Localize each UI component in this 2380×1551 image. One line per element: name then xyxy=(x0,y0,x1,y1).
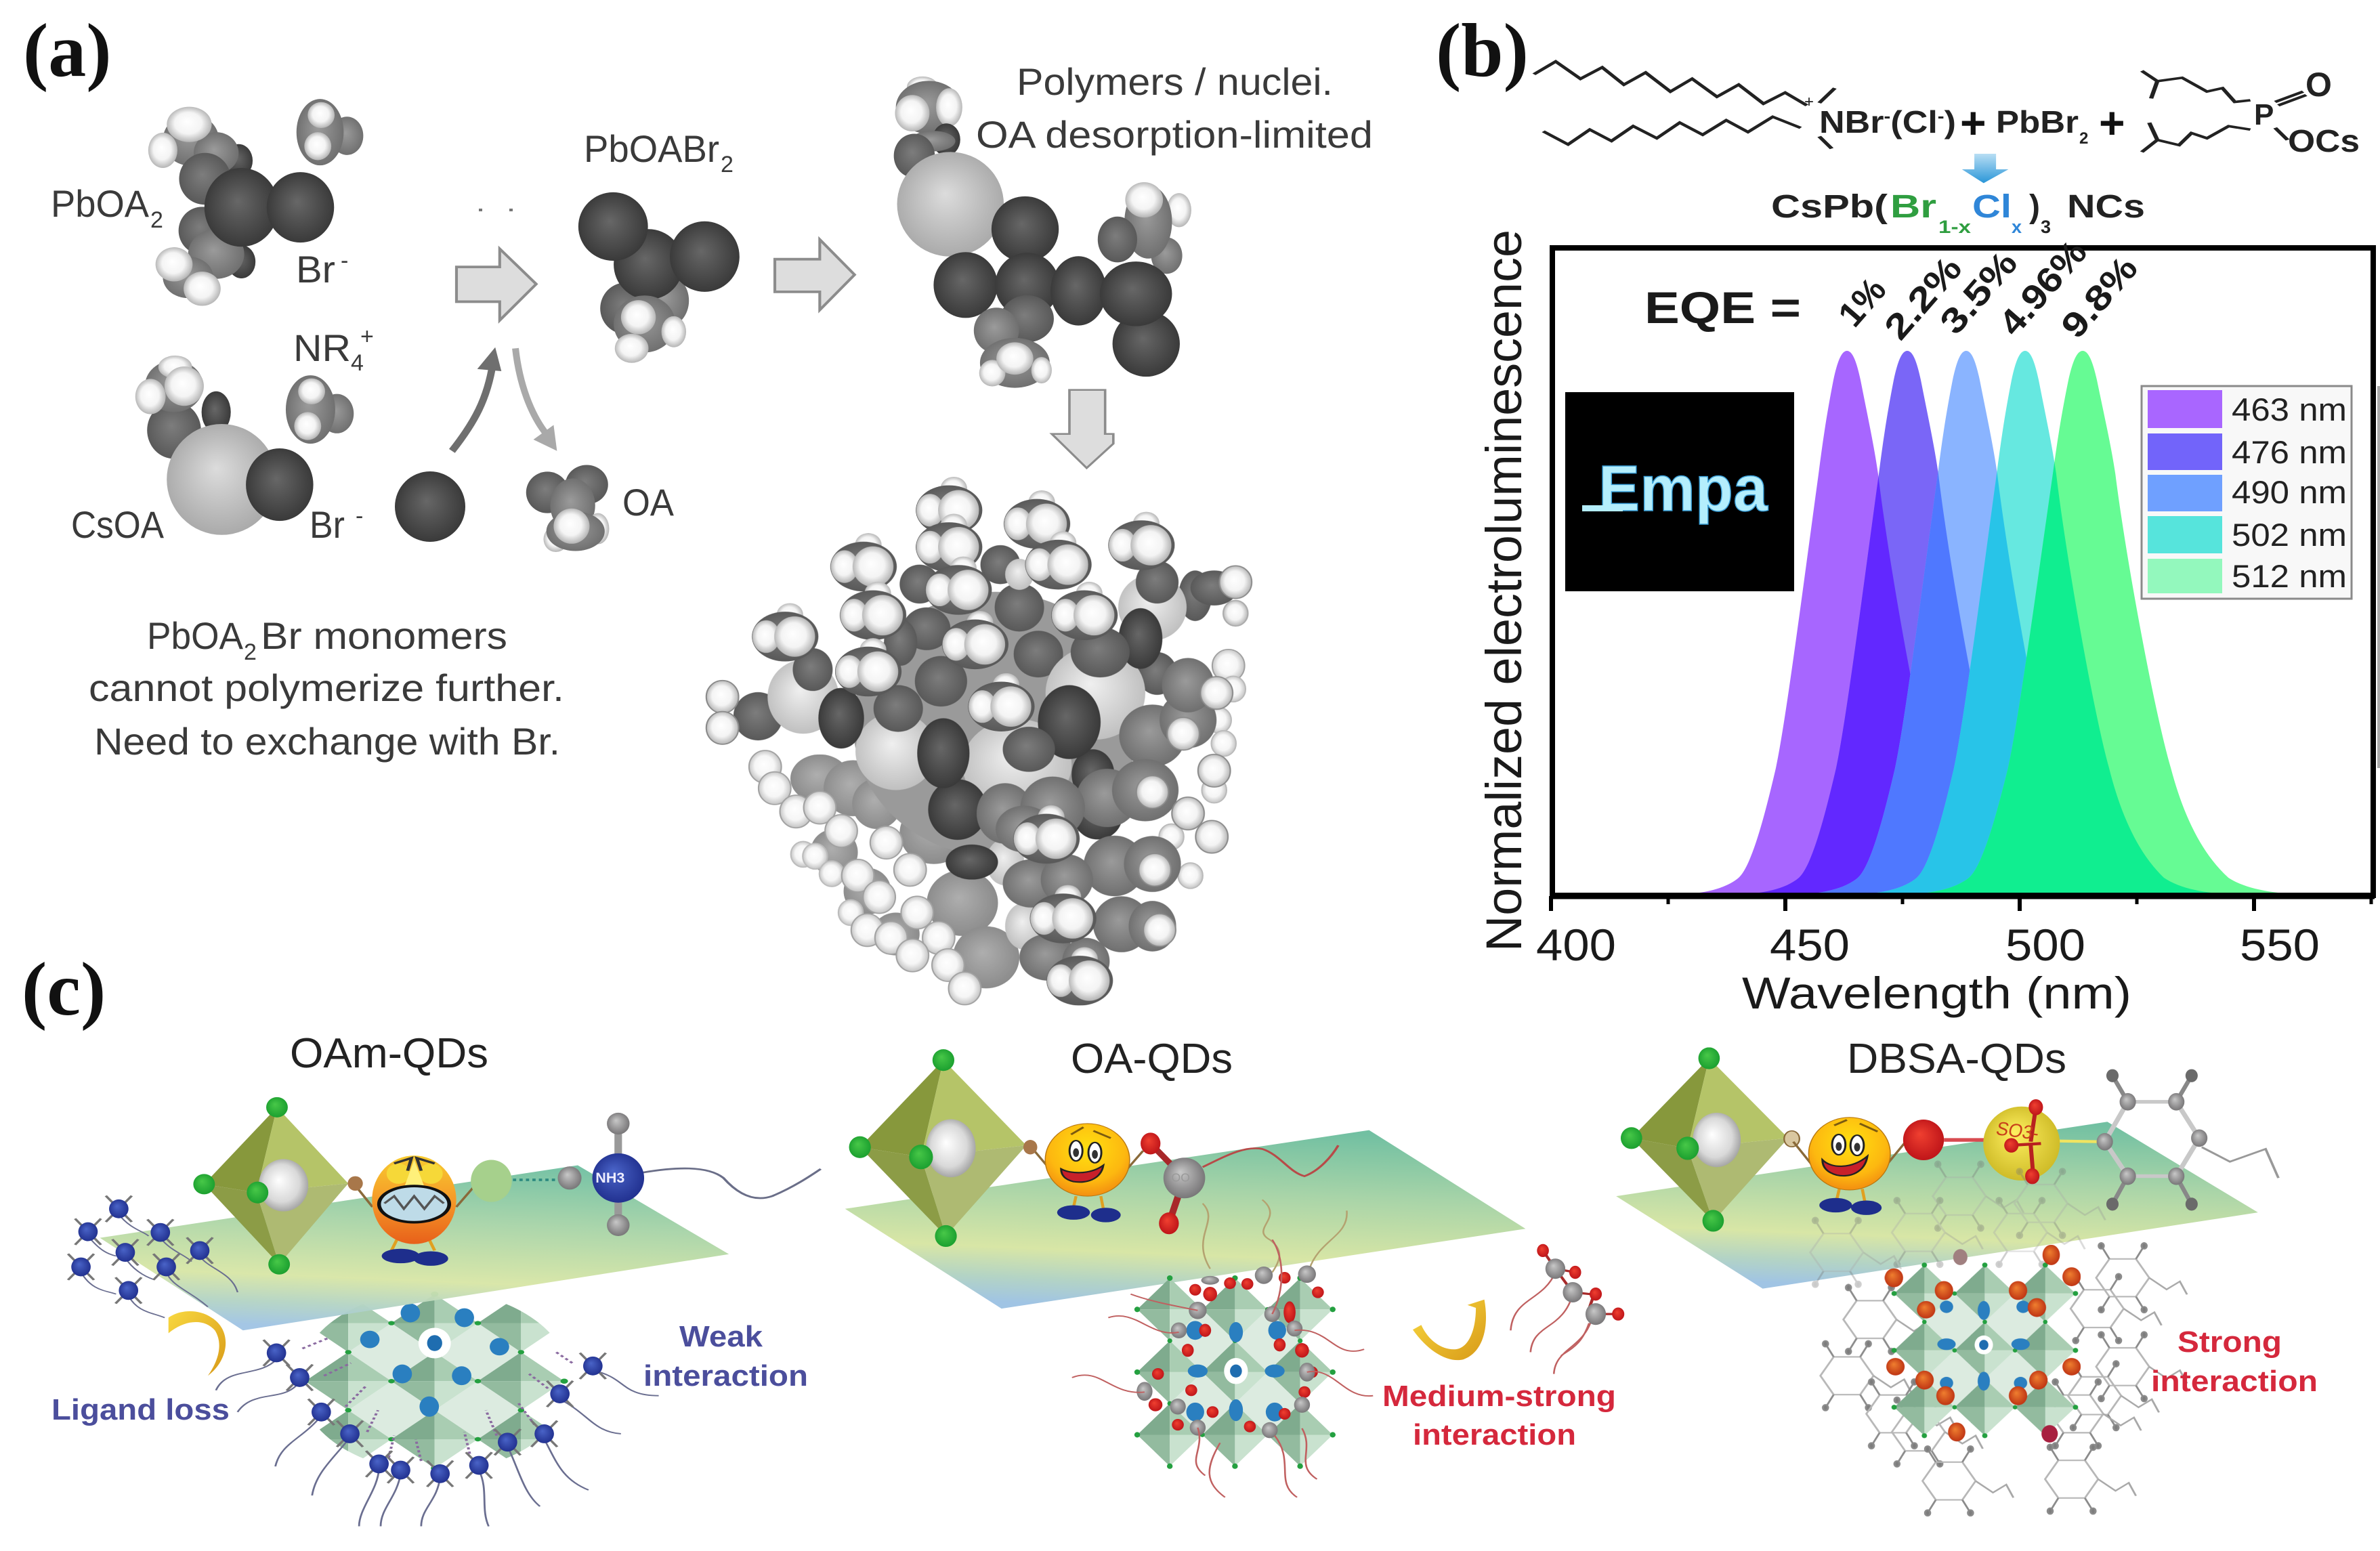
illustration OAm xyxy=(68,1097,821,1527)
text: NR4+: NR xyxy=(293,326,351,369)
atoms NH3 xyxy=(471,1113,821,1236)
text: Weak interaction: interaction xyxy=(643,1359,808,1393)
photo: Empa logo xyxy=(1565,392,1794,591)
tick labels: 450 xyxy=(1770,920,1850,970)
text: product formula: NCs xyxy=(2067,189,2145,225)
text: Weak interaction xyxy=(643,1320,808,1393)
text: EQE values: 2.2% xyxy=(1877,249,1970,347)
legend: 463 nm xyxy=(2232,391,2347,427)
panel (b): emission spectra xyxy=(1436,9,2380,1018)
text: NBr(Cl) xyxy=(1804,93,1956,140)
y axis label: Normalized electroluminescence xyxy=(1476,230,1532,952)
text: Strong interaction xyxy=(2151,1325,2318,1398)
text: product formula: CsPb( xyxy=(1771,189,1888,225)
arrow: right 2 xyxy=(775,240,855,310)
ligands around dot xyxy=(1821,1243,2187,1516)
series 463 nm xyxy=(1674,351,2064,895)
text: NR4+: + xyxy=(360,324,374,349)
bound ligands xyxy=(216,1338,659,1527)
chemical structure: phosphinate xyxy=(2142,66,2360,158)
overlap 490/502 xyxy=(1877,471,2026,893)
quantum dot xyxy=(1134,1265,1336,1469)
text: NR4+: 4 xyxy=(351,350,364,376)
subpanel: OA-QDs xyxy=(845,1036,1624,1497)
text: Strong interaction: interaction xyxy=(2151,1365,2318,1398)
arrow yellow xyxy=(1413,1300,1486,1360)
edge strip xyxy=(2377,386,2380,768)
atoms NH3: NH3 xyxy=(595,1170,625,1186)
text: product formula: ) xyxy=(2029,189,2040,225)
text: monomers note: Need to exchange with Br. xyxy=(94,720,560,763)
text: Medium-strong interaction xyxy=(1382,1380,1616,1451)
core backing xyxy=(853,592,1138,856)
chemical structure: phosphinate: OCs xyxy=(2288,123,2360,158)
text: NBr(Cl): ) xyxy=(1945,104,1956,140)
panel (a): reaction scheme xyxy=(23,9,1373,1006)
text: NBr(Cl): + xyxy=(1804,93,1814,111)
tick labels: 500 xyxy=(2005,920,2085,970)
text: EQE values: 1% xyxy=(1831,270,1894,335)
text: plus: + xyxy=(2099,98,2125,148)
text: NBr(Cl): - xyxy=(1884,106,1890,126)
panel (c): ligand binding xyxy=(22,948,2318,1527)
scared face xyxy=(347,1155,475,1266)
chart frame and ticks xyxy=(1550,248,2375,911)
text: product formula: x xyxy=(2012,217,2022,237)
molecule: polymer chain xyxy=(894,77,1191,388)
light Cs spheres xyxy=(767,559,1187,950)
text: PbBr2: 2 xyxy=(2079,129,2088,148)
chemical structure: phosphinate: O xyxy=(2305,66,2332,104)
label (a): (a) xyxy=(23,9,112,93)
overlap 502/512 xyxy=(1928,462,2211,893)
chemical structure: phosphinate: P xyxy=(2254,98,2274,131)
text: Br- upper: - xyxy=(341,248,348,274)
text: product formula: 3 xyxy=(2041,217,2051,237)
octahedron xyxy=(1621,1047,1800,1232)
text: EQE values: 4.96% xyxy=(1991,233,2095,343)
legend: 502 nm xyxy=(2232,517,2347,553)
molecule: CsOA xyxy=(135,356,314,535)
text: monomers note: cannot polymerize further. xyxy=(89,666,564,709)
text: EQE values: 3.5% xyxy=(1932,244,2025,342)
happy face xyxy=(1023,1124,1143,1223)
text: product formula xyxy=(1771,189,2145,237)
label (c): (c) xyxy=(22,948,106,1032)
text: NBr(Cl): NBr xyxy=(1819,104,1876,140)
subpanel: OAm-QDs xyxy=(51,1030,821,1527)
mid gray backbones xyxy=(734,545,1238,740)
molecule: PbOABr2 xyxy=(578,192,740,363)
text: CsOA: CsOA xyxy=(71,503,165,546)
plane xyxy=(1616,1122,2258,1289)
text: plus: + xyxy=(1960,98,1986,148)
text: PbOA2: PbOA xyxy=(51,182,150,225)
legend xyxy=(2142,386,2352,599)
sphere: Br ion xyxy=(395,471,465,542)
text: product formula: Cl xyxy=(1972,189,2012,225)
text: Medium-strong interaction: interaction xyxy=(1413,1418,1576,1451)
chemical structure: ammonium salt xyxy=(1534,62,1835,148)
lower right gray blocks xyxy=(977,658,1216,985)
text: OA: OA xyxy=(622,481,675,524)
methyl caps xyxy=(916,477,982,535)
arrow ligand loss xyxy=(169,1311,226,1376)
text: NR4+ xyxy=(293,324,374,376)
text: PbOABr2: 2 xyxy=(721,152,734,177)
legend: 512 nm xyxy=(2232,558,2347,594)
molecule: PbOA2 xyxy=(148,107,334,306)
title: OAm-QDs xyxy=(290,1030,488,1077)
text: NBr(Cl): - xyxy=(1938,106,1945,126)
quantum dot xyxy=(301,1292,568,1471)
text: NBr(Cl): (Cl xyxy=(1890,104,1938,140)
series 490 nm xyxy=(1793,351,2183,895)
text: Medium-strong interaction: Medium-strong xyxy=(1382,1380,1616,1413)
arrow: exchange up and OA release xyxy=(452,347,557,451)
atoms carboxyl: OO xyxy=(1172,1170,1190,1185)
illustration OA xyxy=(845,1049,1592,1497)
tick labels xyxy=(1536,920,2320,970)
text: polymers note xyxy=(976,60,1373,156)
molecule: nanocrystal cluster xyxy=(706,477,1252,1006)
faded ligand chains, lower left xyxy=(749,750,1019,1004)
text: monomers note: Br monomers xyxy=(261,614,507,657)
text: Weak interaction: Weak xyxy=(679,1320,763,1353)
free OA ligands xyxy=(1510,1244,1592,1374)
white hydrogens xyxy=(706,681,738,713)
molecule: NR4 lower xyxy=(286,375,354,444)
molecule: NR4 upper xyxy=(297,99,363,165)
tick labels: 400 xyxy=(1536,920,1616,970)
dots xyxy=(479,209,513,211)
series 502 nm xyxy=(1852,351,2242,895)
octahedron xyxy=(193,1097,348,1275)
faint ligands on plane xyxy=(1810,1162,2105,1288)
free OA tail atoms xyxy=(1561,1288,1624,1356)
quantum dot xyxy=(1885,1245,2081,1443)
text: monomers note xyxy=(89,614,564,763)
text: polymers note: OA desorption-limited xyxy=(976,113,1373,156)
text: Br- upper: Br xyxy=(296,248,335,291)
tick labels: 550 xyxy=(2240,920,2320,970)
text: polymers note: Polymers / nuclei. xyxy=(1017,60,1333,103)
text: Br- lower: - xyxy=(356,503,363,529)
overlap 463/476 xyxy=(1760,477,1910,893)
text: PbBr2 xyxy=(1996,104,2088,148)
text: Strong interaction: Strong xyxy=(2177,1325,2282,1359)
overlap 476/490 xyxy=(1819,471,1970,893)
photo: Empa logo: Empa xyxy=(1598,452,1768,525)
arrow: blue down xyxy=(1962,154,2008,183)
text: Ligand loss: Ligand loss xyxy=(51,1393,230,1426)
text: monomers note: 2 xyxy=(244,639,257,665)
arrow: down xyxy=(1052,390,1113,468)
series 476 nm xyxy=(1735,351,2124,895)
label (b): (b) xyxy=(1436,9,1529,93)
atoms sulfonate xyxy=(1903,1099,2102,1184)
title: OA-QDs xyxy=(1071,1036,1233,1082)
subpanel: DBSA-QDs xyxy=(1616,1036,2318,1516)
legend: 490 nm xyxy=(2232,474,2347,510)
bound tails xyxy=(1072,1239,1373,1497)
plane xyxy=(845,1130,1525,1309)
molecule: OA xyxy=(526,465,609,552)
illustration DBSA xyxy=(1616,1047,2278,1516)
atoms carboxyl xyxy=(1141,1132,1338,1234)
benzene ring xyxy=(2097,1069,2278,1210)
chart: electroluminescence spectra xyxy=(1674,351,2310,895)
atoms sulfonate: SO3- xyxy=(1994,1118,2041,1144)
light faded chains, right xyxy=(1159,650,1246,889)
dark arms xyxy=(792,561,1178,772)
octahedron xyxy=(849,1049,1026,1247)
text: monomers note: PbOA xyxy=(147,614,244,657)
text: product formula: Br xyxy=(1890,189,1936,225)
text: product formula: 1-x xyxy=(1938,217,1971,237)
x axis label: Wavelength (nm) xyxy=(1742,968,2131,1018)
text: PbOABr2: PbOABr xyxy=(584,127,719,170)
text: PbOA2: 2 xyxy=(150,207,163,233)
text: PbBr2: PbBr xyxy=(1996,104,2079,140)
text: Br- lower: Br xyxy=(310,503,345,546)
title: DBSA-QDs xyxy=(1847,1036,2066,1082)
arrow: right 1 xyxy=(456,249,536,320)
small ligands lost xyxy=(68,1196,238,1318)
happy face xyxy=(1793,1118,1906,1215)
series 512 nm xyxy=(1901,351,2310,895)
dark Br spheres xyxy=(818,608,1162,880)
text: EQE values: 9.8% xyxy=(2054,249,2146,346)
text: EQE values xyxy=(1831,233,2146,347)
faint ligand tails xyxy=(1203,1199,1347,1273)
text: EQE: EQE = xyxy=(1644,282,1801,333)
legend: 476 nm xyxy=(2232,434,2347,470)
plane xyxy=(100,1166,729,1330)
